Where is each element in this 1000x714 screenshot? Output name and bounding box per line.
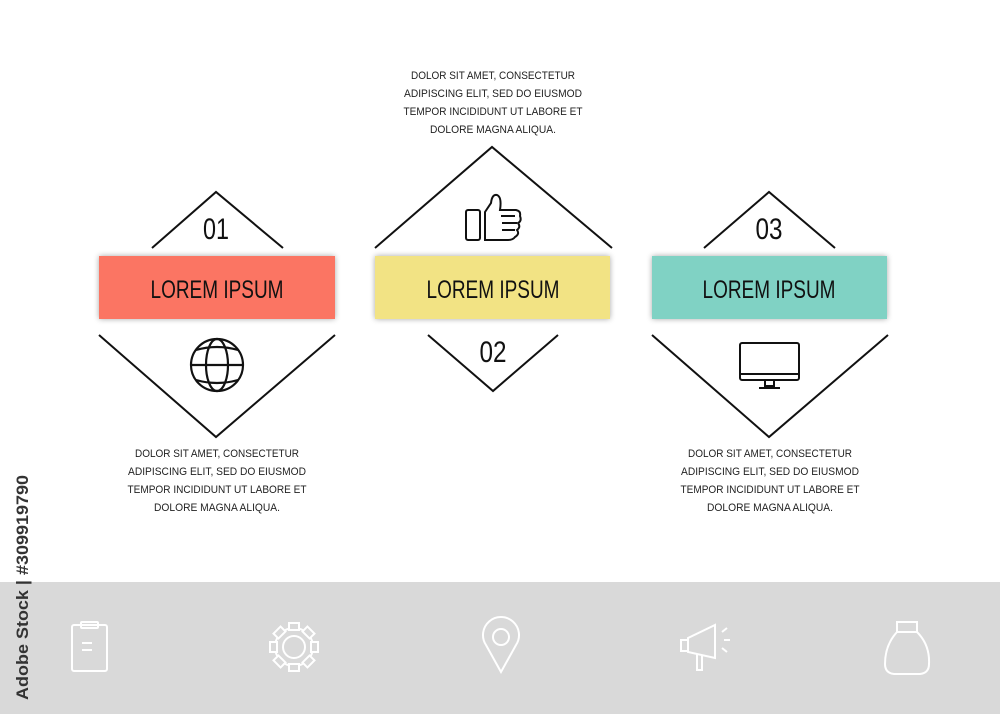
panel: step 03	[652, 192, 888, 437]
icon: bag	[885, 622, 929, 674]
icon: clipboard	[72, 622, 107, 671]
number 02: 02	[480, 336, 506, 369]
top text block: DOLOR SIT AMET, CONSECTETUR	[411, 70, 575, 82]
icon: megaphone	[681, 625, 730, 670]
text block: right	[680, 448, 860, 514]
panel: step 02	[375, 147, 612, 391]
icon: monitor	[740, 343, 799, 388]
footer band	[0, 582, 1000, 714]
text block: left: DOLOR SIT AMET, CONSECTETUR	[135, 448, 299, 460]
text block: right: TEMPOR INCIDIDUNT UT LABORE ET	[680, 484, 860, 496]
text block: left: ADIPISCING ELIT, SED DO EIUSMOD	[128, 466, 306, 478]
banner 03: LOREM IPSUM	[702, 276, 836, 304]
banner 01	[99, 256, 335, 319]
panel: step 01	[99, 192, 335, 437]
top text block: TEMPOR INCIDIDUNT UT LABORE ET	[404, 106, 583, 118]
icon: gear	[270, 623, 318, 671]
icon: globe	[191, 339, 243, 391]
banner 01: LOREM IPSUM	[150, 276, 284, 304]
text block: left	[128, 448, 307, 514]
number 03: 03	[756, 213, 782, 246]
text block: left: DOLORE MAGNA ALIQUA.	[154, 502, 280, 514]
icon: thumbs up	[466, 195, 521, 240]
banner 03	[652, 256, 887, 319]
text block: right: DOLOR SIT AMET, CONSECTETUR	[688, 448, 852, 460]
top text block: DOLORE MAGNA ALIQUA.	[430, 124, 556, 136]
icon: location pin	[483, 617, 519, 672]
watermark id: Adobe Stock | #309919790	[13, 475, 32, 700]
top text block	[404, 70, 583, 136]
text block: left: TEMPOR INCIDIDUNT UT LABORE ET	[128, 484, 307, 496]
number 01: 01	[203, 213, 229, 246]
text block: right: ADIPISCING ELIT, SED DO EIUSMOD	[681, 466, 859, 478]
banner 02	[375, 256, 610, 319]
top text block: ADIPISCING ELIT, SED DO EIUSMOD	[404, 88, 582, 100]
banner 02: LOREM IPSUM	[426, 276, 560, 304]
text block: right: DOLORE MAGNA ALIQUA.	[707, 502, 833, 514]
